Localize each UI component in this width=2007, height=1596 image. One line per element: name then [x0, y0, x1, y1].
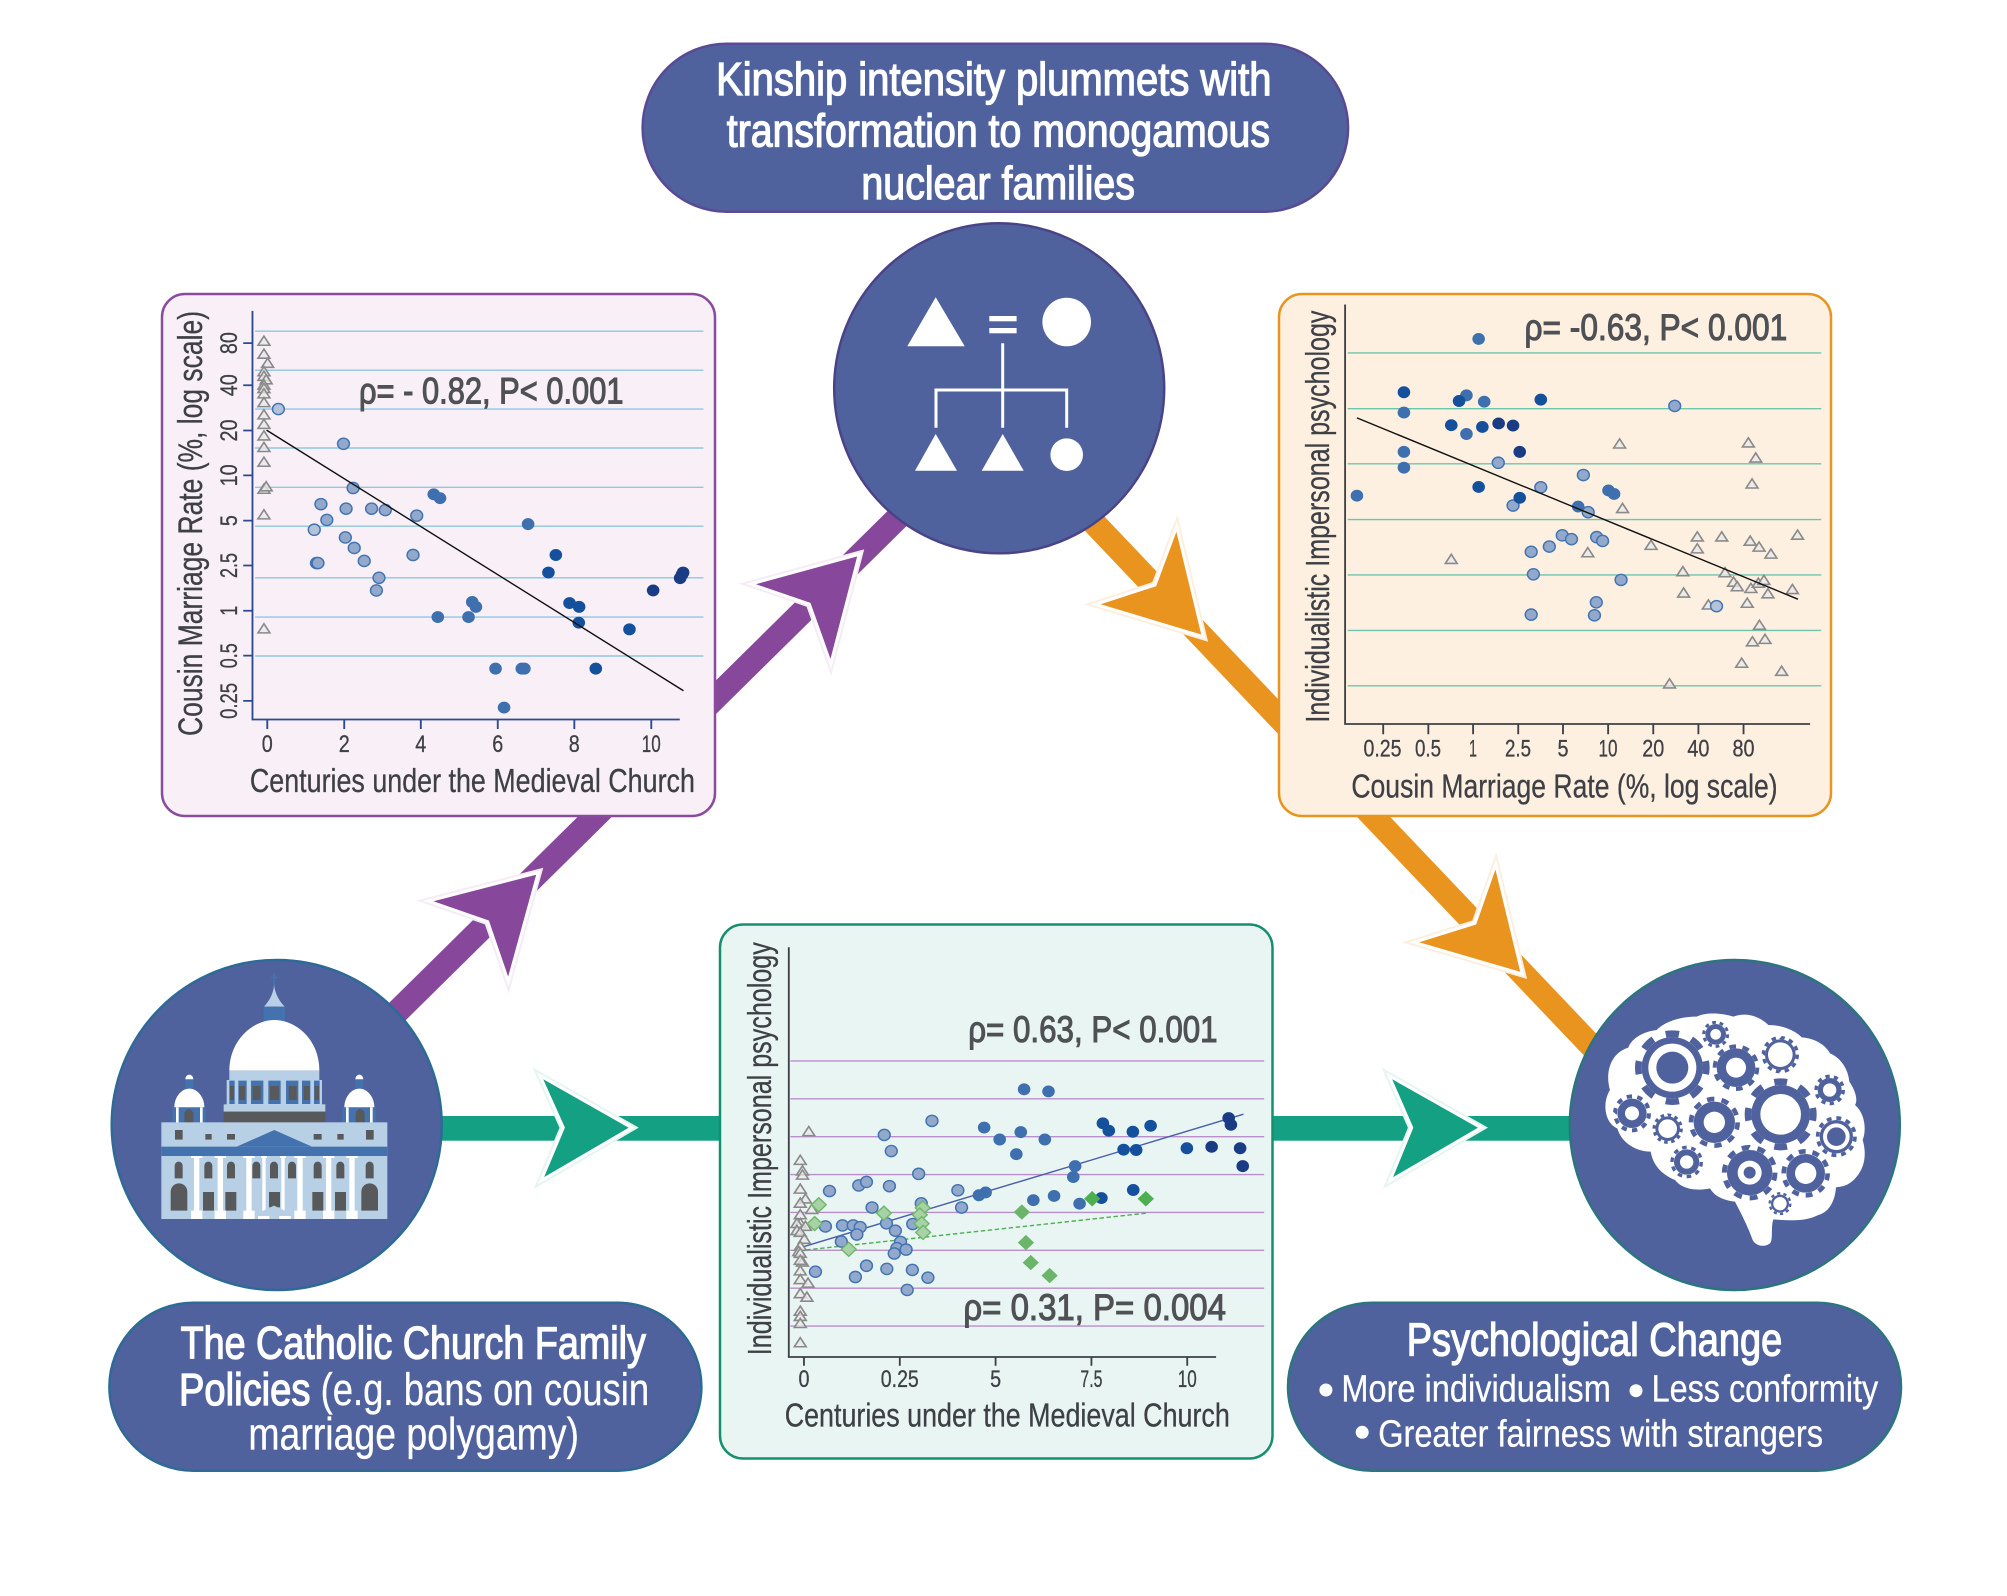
pill: psychological change: More individualism [1341, 1369, 1611, 1411]
correlation label: ρ= - 0.82, P< 0.001 [359, 370, 624, 412]
panel: centuries vs cousin marriage [162, 294, 715, 816]
y axis ticks: 2.5 [216, 553, 243, 578]
x axis ticks: 80 [1732, 735, 1754, 762]
pill: psychological change: Psychological Change [1407, 1314, 1782, 1366]
pill: Catholic Church policies: The Catholic Church Family [181, 1317, 646, 1368]
x axis ticks: 0 [798, 1366, 810, 1393]
y axis ticks: 0.5 [216, 643, 243, 668]
arrow: church to psychology (teal) [430, 1076, 1590, 1181]
x axis ticks: 2.5 [1505, 735, 1531, 762]
y axis ticks: 20 [216, 420, 243, 442]
y axis ticks: 10 [216, 464, 243, 486]
x axis ticks: 0.5 [1415, 735, 1441, 762]
chart: scatter of cousin marriage rate [243, 311, 703, 729]
x axis ticks: 10 [1598, 735, 1618, 762]
x axis ticks [798, 1366, 1197, 1393]
pill: Catholic Church policies: (e.g. bans on cousin [321, 1364, 649, 1415]
x axis ticks: 20 [1642, 735, 1664, 762]
heading pill: kinship intensity [643, 44, 1348, 212]
x axis ticks: 0.25 [881, 1366, 919, 1393]
x axis ticks: 6 [492, 731, 503, 758]
x axis ticks [1364, 735, 1754, 762]
y axis ticks: 1 [216, 606, 243, 616]
correlation label: ρ= -0.63, P< 0.001 [1524, 307, 1787, 348]
y axis ticks: 80 [216, 332, 243, 354]
correlation label: green subset: ρ= 0.31, P= 0.004 [963, 1287, 1226, 1328]
correlation label: all: ρ= 0.63, P< 0.001 [968, 1009, 1218, 1050]
panel: cousin marriage vs psychology [1279, 294, 1831, 816]
pill: psychological change: Greater fairness with strangers [1378, 1414, 1823, 1456]
x axis ticks: 7.5 [1080, 1366, 1102, 1393]
x axis ticks: 40 [1687, 735, 1709, 762]
x axis ticks: 2 [339, 731, 350, 758]
x axis ticks: 1 [1469, 735, 1477, 762]
icon circle: church [112, 960, 442, 1290]
heading pill: kinship intensity: Kinship intensity plummets with [716, 53, 1272, 105]
icon circle: brain with gears [1570, 960, 1900, 1290]
y axis label: Individualistic Impersonal psychology [741, 942, 778, 1355]
heading pill: kinship intensity: transformation to monogamous [727, 105, 1270, 157]
x axis ticks: 5 [1558, 735, 1568, 762]
x axis ticks: 10 [1178, 1366, 1197, 1393]
y axis label: Individualistic Impersonal psychology [1299, 310, 1336, 723]
gears [1615, 1022, 1855, 1214]
y axis label: Cousin Marriage Rate (%, log scale) [172, 311, 210, 736]
arrow: kinship to psychology (orange) [1075, 503, 1620, 1076]
y axis ticks [216, 332, 243, 719]
chart: scatter of psychology vs centuries [789, 947, 1264, 1366]
panel: centuries vs psychology [720, 924, 1272, 1458]
x axis ticks: 5 [990, 1366, 1001, 1393]
x axis ticks [262, 731, 661, 758]
x axis ticks: 8 [569, 731, 580, 758]
pill: psychological change: Less conformity [1652, 1369, 1878, 1411]
x axis ticks: 0 [262, 731, 273, 758]
icon: basilica [161, 973, 387, 1219]
y axis ticks: 0.25 [216, 683, 243, 719]
chart: scatter of psychology vs cousin marriage [1345, 305, 1821, 734]
x axis label: Centuries under the Medieval Church [785, 1396, 1230, 1433]
pill: Catholic Church policies: marriage polygamy) [248, 1408, 579, 1459]
x axis label: Centuries under the Medieval Church [250, 762, 695, 799]
x axis ticks: 0.25 [1364, 735, 1402, 762]
x axis ticks: 4 [415, 731, 426, 758]
x axis ticks: 10 [642, 731, 661, 758]
y axis ticks: 40 [216, 374, 243, 396]
x axis label: Cousin Marriage Rate (%, log scale) [1351, 767, 1778, 804]
arrow: church to kinship (purple) [370, 486, 930, 1039]
icon: brain [1605, 1014, 1865, 1246]
heading pill: kinship intensity: nuclear families [861, 157, 1135, 209]
icon circle: nuclear family [834, 223, 1164, 553]
pill: psychological change [1288, 1303, 1901, 1471]
pill: Catholic Church policies: Policies [179, 1364, 310, 1415]
y axis ticks: 5 [216, 515, 243, 526]
pill: Catholic Church policies [109, 1303, 701, 1471]
